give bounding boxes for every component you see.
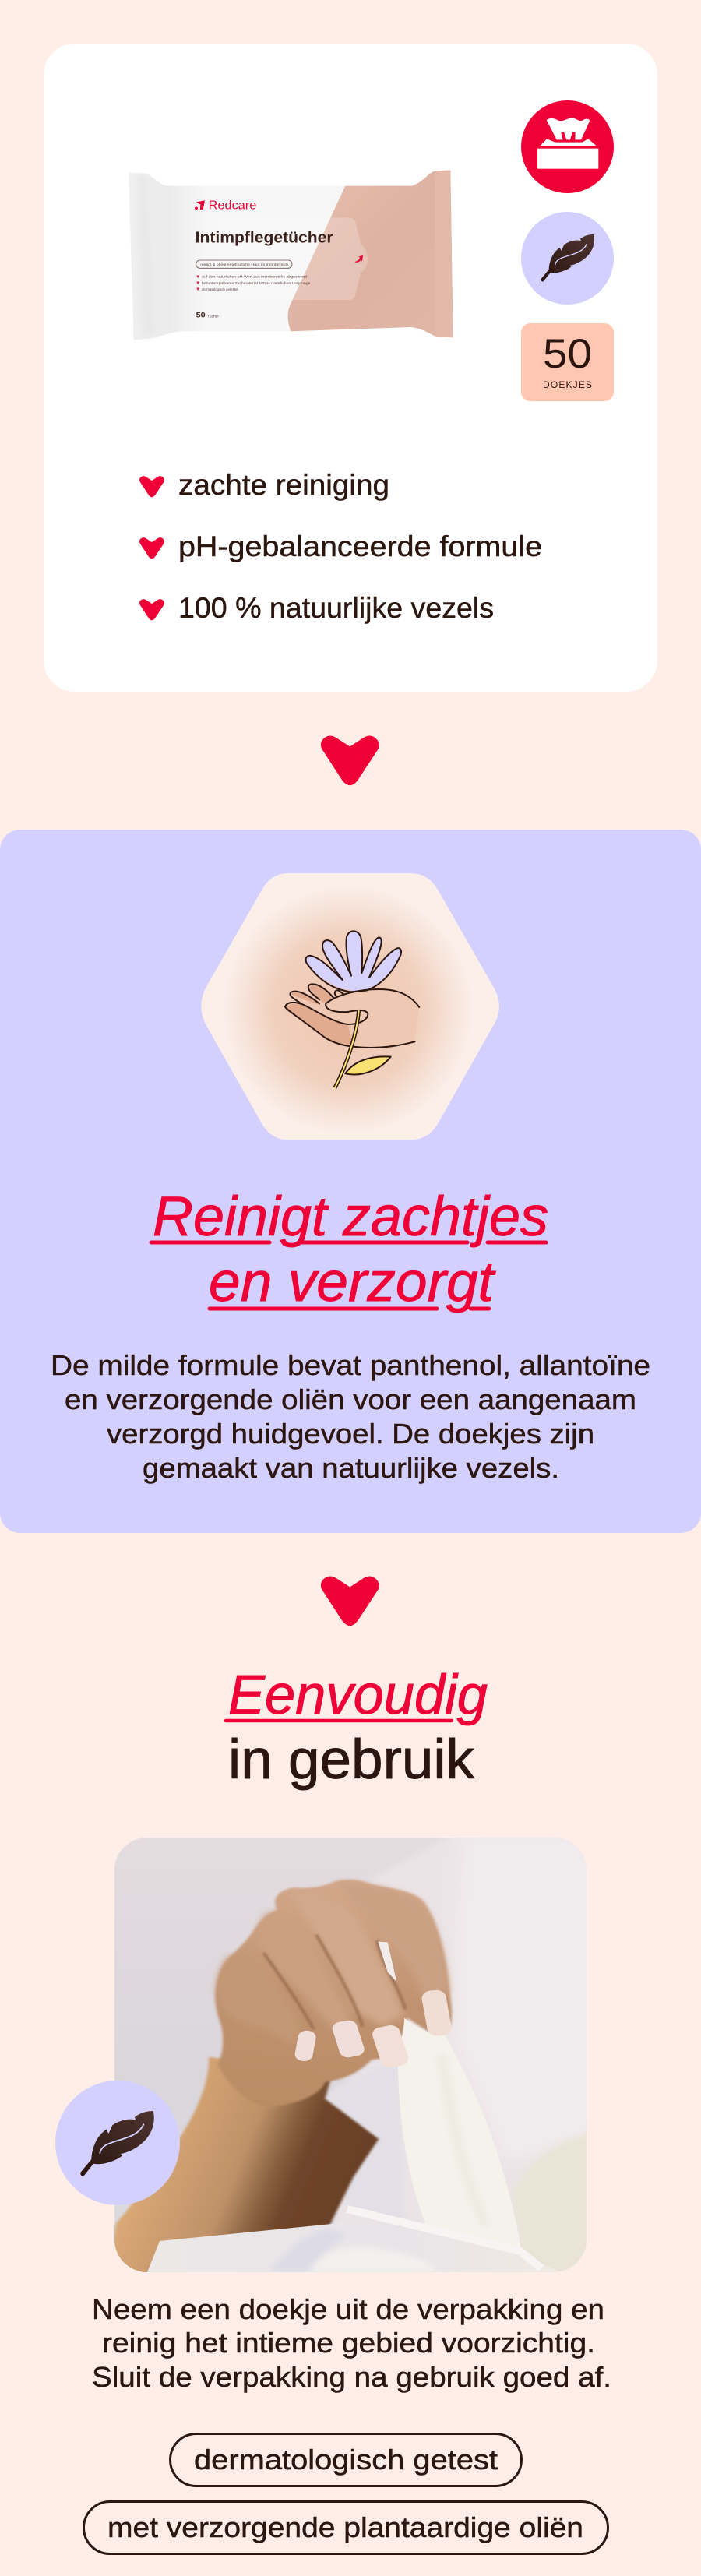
finger shading	[260, 1912, 352, 2032]
wipe	[398, 2018, 523, 2266]
product pack: Redcare Intimpflegetücher: Redcare	[209, 199, 256, 212]
panel: product card	[44, 44, 657, 692]
arrow: heart divider 2	[321, 1576, 379, 1626]
product pack: Redcare Intimpflegetücher: herunterspülbares Tuchmaterial 100 % natürlichen Ursprungs	[202, 281, 311, 285]
badge: 50 doekjes: 50	[543, 331, 592, 377]
text block: description	[51, 1349, 650, 1484]
panel: reinigt zachtjes	[0, 830, 701, 1533]
arrow: heart divider 1	[321, 735, 379, 785]
badge: 50 doekjes	[521, 323, 614, 401]
forearm from light side to shadow	[107, 2057, 379, 2282]
badge: 50 doekjes: DOEKJES	[543, 379, 592, 390]
illustration: hand holding flower in hexagon	[201, 873, 499, 1140]
text block: usage instructions: Neem een doekje uit de verpakking en	[92, 2293, 604, 2325]
hand	[215, 1880, 452, 2107]
text block: description: en verzorgende oliën voor een aangenaam	[65, 1383, 636, 1415]
product pack: Redcare Intimpflegetücher: reinigt & pflegt empfindliche Haut im Intimbereich	[200, 263, 288, 267]
pill: dermatologisch getest: dermatologisch getest	[194, 2444, 498, 2476]
text block: usage instructions: reinig het intieme gebied voorzichtig.	[102, 2327, 595, 2359]
heading: eenvoudig in gebruik: Eenvoudig	[228, 1665, 488, 1726]
text block: description: gemaakt van natuurlijke vezels.	[143, 1452, 559, 1484]
text block: usage instructions	[92, 2293, 611, 2393]
icon: feather on lilac circle	[521, 212, 614, 305]
text block: usage instructions: Sluit de verpakking na gebruik goed af.	[92, 2361, 611, 2393]
product pack: Redcare Intimpflegetücher	[129, 170, 453, 340]
nails	[294, 2030, 316, 2061]
pill: dermatologisch getest	[170, 2433, 522, 2486]
heading: reinigt zachtjes en verzorgt: Reinigt zachtjes	[153, 1186, 548, 1248]
product pack: Redcare Intimpflegetücher: Intimpflegetücher	[196, 230, 333, 247]
gap between fingers	[378, 1941, 396, 1982]
benefit: 100% natuurlijke vezels: 100 % natuurlijke vezels	[178, 592, 494, 624]
shirt	[335, 1844, 541, 2232]
heading: reinigt zachtjes en verzorgt	[151, 1186, 548, 1313]
product pack: Redcare Intimpflegetücher: Tücher	[207, 314, 220, 318]
heading: eenvoudig in gebruik: in gebruik	[228, 1729, 475, 1791]
icon: tissue box on red circle	[521, 100, 614, 193]
cream fabric lower right	[511, 2134, 587, 2271]
icon: feather badge overlapping photo	[55, 2081, 180, 2205]
text block: description: verzorgd huidgevoel. De doekjes zijn	[107, 1418, 594, 1450]
product pack: Redcare Intimpflegetücher: dermatologisch getestet	[202, 287, 238, 291]
photo: hand pulling a wipe from the pack	[107, 1831, 597, 2282]
heading: reinigt zachtjes en verzorgt: en verzorgt	[209, 1252, 496, 1313]
product pack: Redcare Intimpflegetücher: auf den natürlichen pH-Wert des Intimbereichs abgestimmt	[202, 275, 308, 279]
pill: met verzorgende plantaardige oliën	[84, 2502, 608, 2553]
text block: description: De milde formule bevat panthenol, allantoïne	[51, 1349, 650, 1381]
benefit: zachte reiniging: zachte reiniging	[178, 469, 389, 501]
tissue pack in photo	[147, 2209, 561, 2272]
pill: met verzorgende plantaardige oliën: met verzorgende plantaardige oliën	[107, 2511, 583, 2543]
finger gaps	[263, 1935, 406, 2029]
heading: eenvoudig in gebruik	[226, 1665, 488, 1791]
product pack: Redcare Intimpflegetücher: 50	[196, 311, 206, 319]
benefit: pH-gebalanceerde formule: pH-gebalanceerde formule	[178, 530, 542, 562]
